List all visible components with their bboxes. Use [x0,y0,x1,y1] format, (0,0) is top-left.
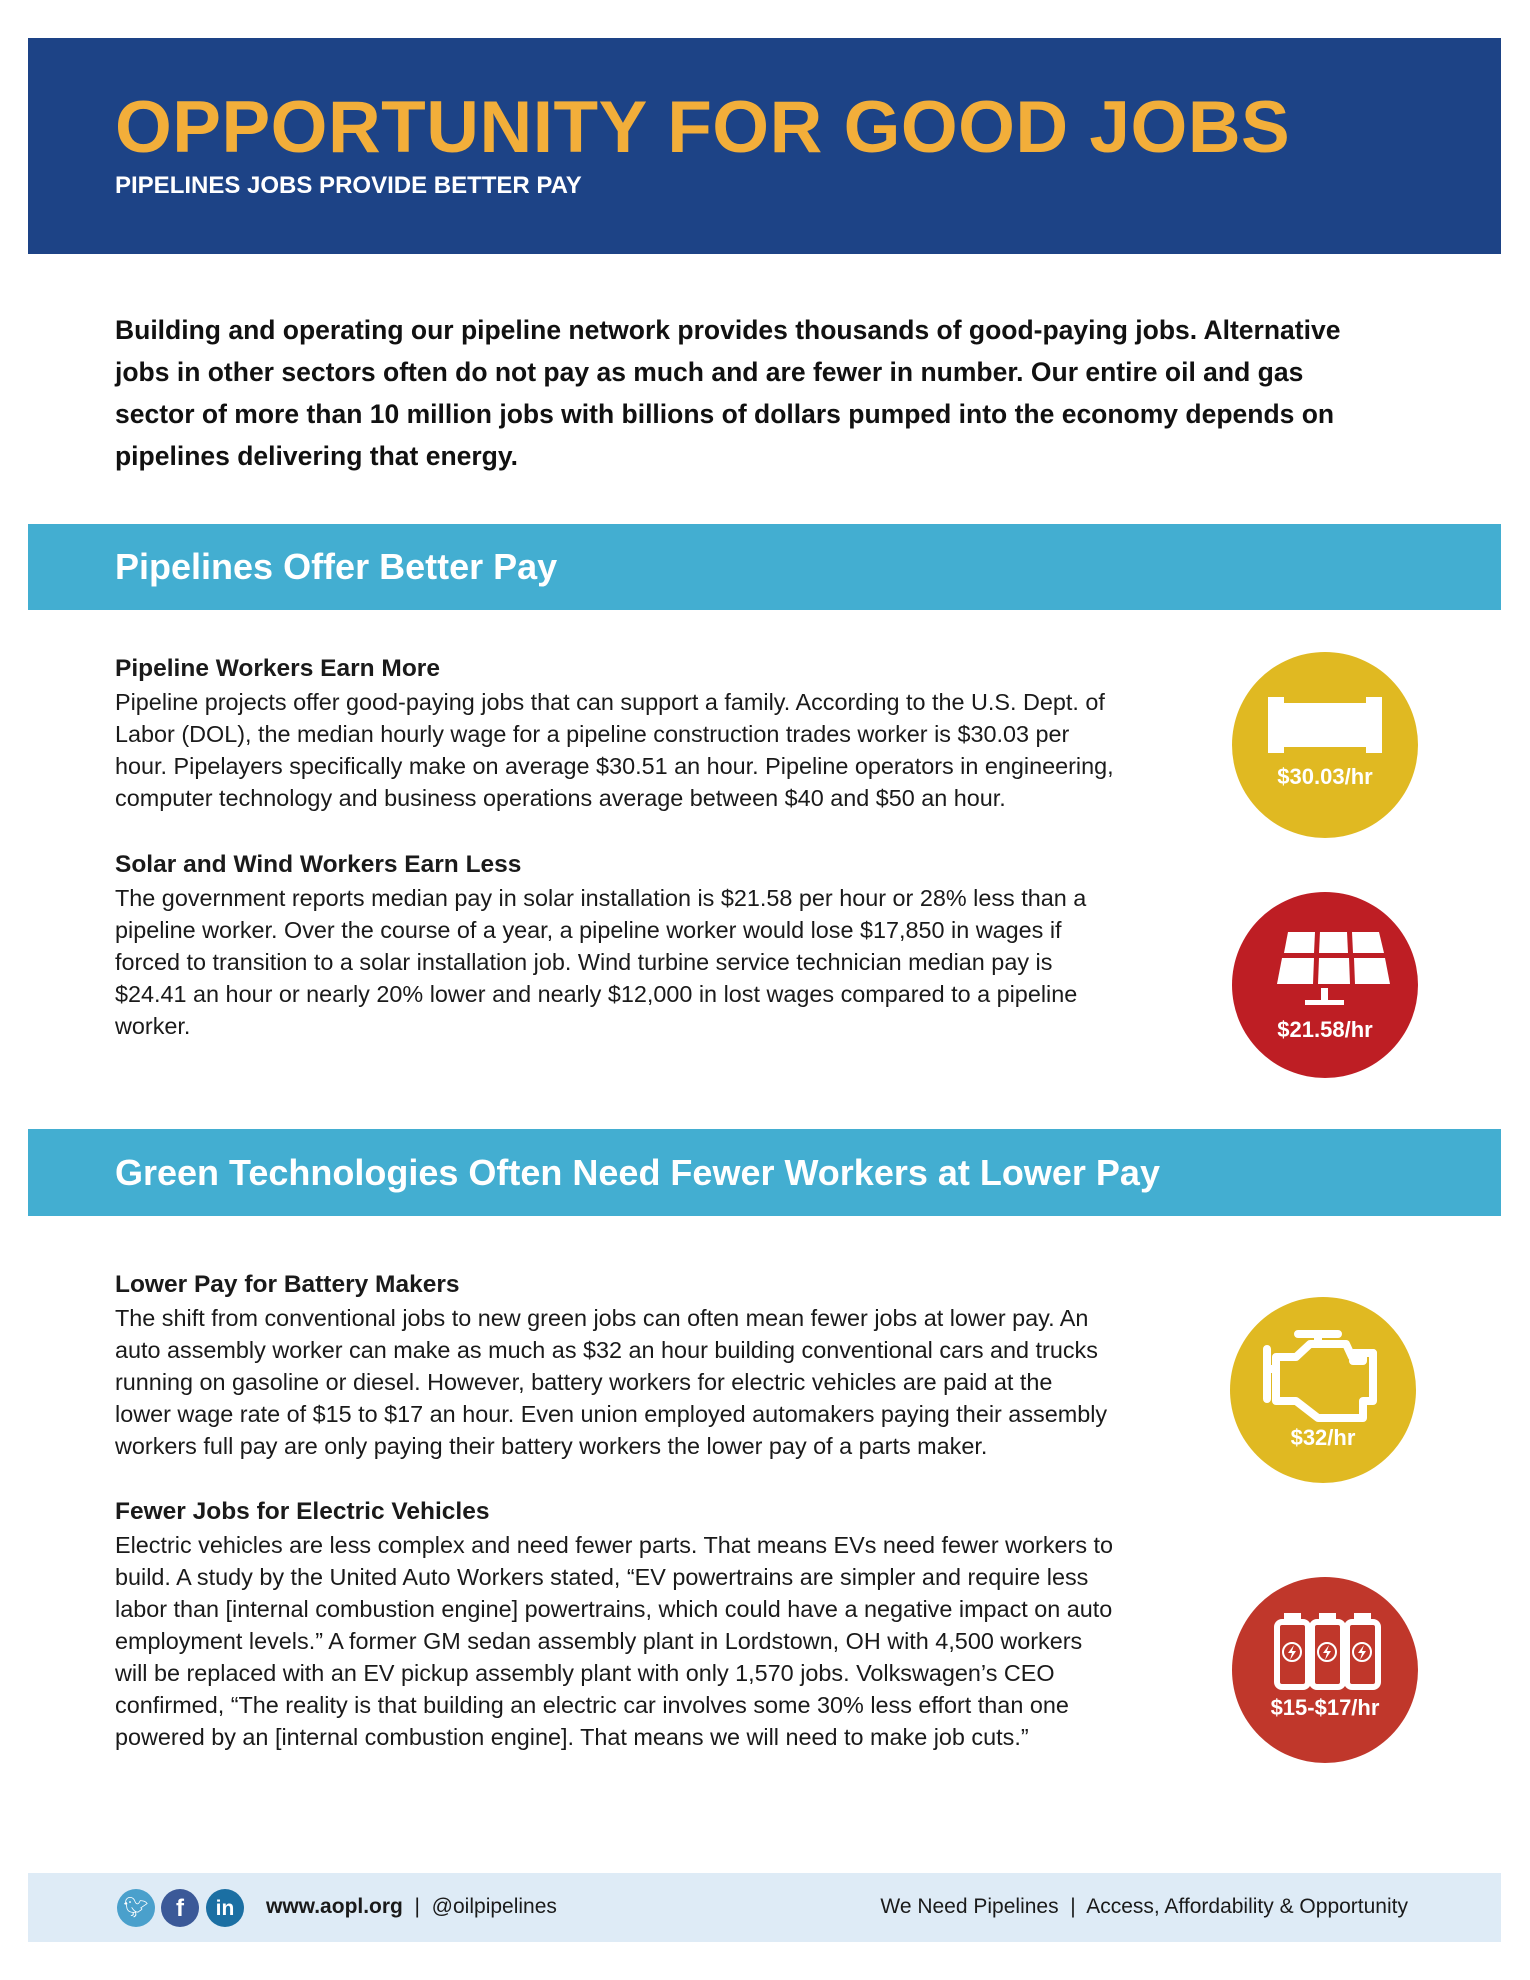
text block: Fewer Jobs for Electric Vehicles [115,1498,1113,1750]
icon: engine $32/hr [1230,1297,1416,1483]
text block: Solar and Wind Workers Earn Less: worker. [115,1013,190,1039]
text block: Lower Pay for Battery Makers: workers full pay are only paying their battery workers the lower pay of a parts maker. [115,1433,987,1459]
section heading: Pipelines Offer Better Pay: Pipelines Offer Better Pay [115,546,557,587]
section heading: Green Technologies [28,1129,1501,1216]
text block: Solar and Wind Workers Earn Less: pipeline worker. Over the course of a year, a pipeline worker would lose $17,850 in wages if [115,917,1062,943]
text block: Fewer Jobs for Electric Vehicles: powered by an [internal combustion engine]. That means we will need to make job cuts.” [115,1724,1029,1750]
intro paragraph [114,315,1340,471]
icon: linkedin [206,1889,244,1927]
text block: Pipeline Workers Earn More: Labor (DOL), the median hourly wage for a pipeline construction trades worker is $30.03 per [115,721,1069,747]
text block: Lower Pay for Battery Makers: running on gasoline or diesel. However, battery workers for electric vehicles are paid at the [115,1369,1052,1395]
text block: Fewer Jobs for Electric Vehicles: build. A study by the United Auto Workers stated, “EV powertrains are simpler and require less [115,1564,1088,1590]
section heading: Green Technologies: Green Technologies Often Need Fewer Workers at Lower Pay [115,1152,1160,1193]
text block: Solar and Wind Workers Earn Less: forced to transition to a solar installation job. Wind turbine service technician median pay is [115,949,1052,975]
icon: pipe $30.03/hr [1232,652,1418,838]
text block: Pipeline Workers Earn More [115,655,1114,811]
title: OPPORTUNITY FOR GOOD JOBS [115,87,1290,168]
icon: linkedin: in [216,1897,234,1920]
text block: Lower Pay for Battery Makers: The shift from conventional jobs to new green jobs can often mean fewer jobs at lower pay. An [115,1305,1088,1331]
icon: facebook [161,1889,199,1927]
icon: solar panel $21.58/hr: $21.58/hr [1277,1017,1373,1042]
icon: twitter [117,1889,155,1927]
text block: Pipeline Workers Earn More: computer technology and business operations average between $40 and $50 an hour. [115,785,1006,811]
icon: solar panel $21.58/hr [1232,892,1418,1078]
icon: batteries $15-$17/hr [1232,1577,1418,1763]
text block: Fewer Jobs for Electric Vehicles: Fewer Jobs for Electric Vehicles [115,1498,489,1525]
footer [28,1873,1501,1942]
text block: Fewer Jobs for Electric Vehicles: labor than [internal combustion engine] powertrains, which could have a negative impact on auto [115,1596,1112,1622]
footer website: www.aopl.org | @oilpipelines [266,1895,557,1918]
section heading: Pipelines Offer Better Pay [28,524,1501,610]
text block: Pipeline Workers Earn More: hour. Pipelayers specifically make on average $30.51 an hour. Pipeline operators in engineering, [115,753,1114,779]
icon: batteries $15-$17/hr: $15-$17/hr [1271,1695,1379,1720]
text block: Fewer Jobs for Electric Vehicles: employment levels.” A former GM sedan assembly plant in Lordstown, OH with 4,500 workers [115,1628,1082,1654]
subtitle: PIPELINES JOBS PROVIDE BETTER PAY [115,172,582,199]
header banner [28,38,1501,254]
intro paragraph: sector of more than 10 million jobs with billions of dollars pumped into the economy depends on [115,399,1334,429]
icon: twitter: 🐦︎ [123,1897,149,1919]
text block: Fewer Jobs for Electric Vehicles: confirmed, “The reality is that building an electric car involves some 30% less effort than one [115,1692,1069,1718]
text block: Solar and Wind Workers Earn Less: Solar and Wind Workers Earn Less [115,851,521,878]
text block: Solar and Wind Workers Earn Less: The government reports median pay in solar installation is $21.58 per hour or 28% less than a [115,885,1086,911]
text block: Lower Pay for Battery Makers: Lower Pay for Battery Makers [115,1271,460,1298]
intro paragraph: pipelines delivering that energy. [115,441,518,471]
icon: facebook: f [176,1895,184,1922]
text block: Lower Pay for Battery Makers: lower wage rate of $15 to $17 an hour. Even union employed automakers paying their assembly [115,1401,1107,1427]
text block: Pipeline Workers Earn More: Pipeline Workers Earn More [115,655,440,682]
text block: Solar and Wind Workers Earn Less: $24.41 an hour or nearly 20% lower and nearly $12,000 in lost wages compared to a pipeline [115,981,1077,1007]
text block: Lower Pay for Battery Makers [115,1271,1107,1459]
intro paragraph: Building and operating our pipeline network provides thousands of good-paying jobs. Alternative [115,315,1340,345]
text block: Pipeline Workers Earn More: Pipeline projects offer good-paying jobs that can support a family. According to the U.S. Dept. of [115,689,1105,715]
footer tagline: We Need Pipelines | Access, Affordability & Opportunity [880,1895,1408,1918]
text block: Fewer Jobs for Electric Vehicles: Electric vehicles are less complex and need fewer parts. That means EVs need fewer workers to [115,1532,1113,1558]
text block: Lower Pay for Battery Makers: auto assembly worker can make as much as $32 an hour building conventional cars and trucks [115,1337,1098,1363]
text block: Fewer Jobs for Electric Vehicles: will be replaced with an EV pickup assembly plant with only 1,570 jobs. Volkswagen’s CEO [115,1660,1055,1686]
text block: Solar and Wind Workers Earn Less [115,851,1086,1039]
icon: pipe $30.03/hr: $30.03/hr [1277,764,1373,789]
intro paragraph: jobs in other sectors often do not pay as much and are fewer in number. Our entire oil and gas [115,357,1303,387]
icon: engine $32/hr: $32/hr [1291,1425,1355,1450]
